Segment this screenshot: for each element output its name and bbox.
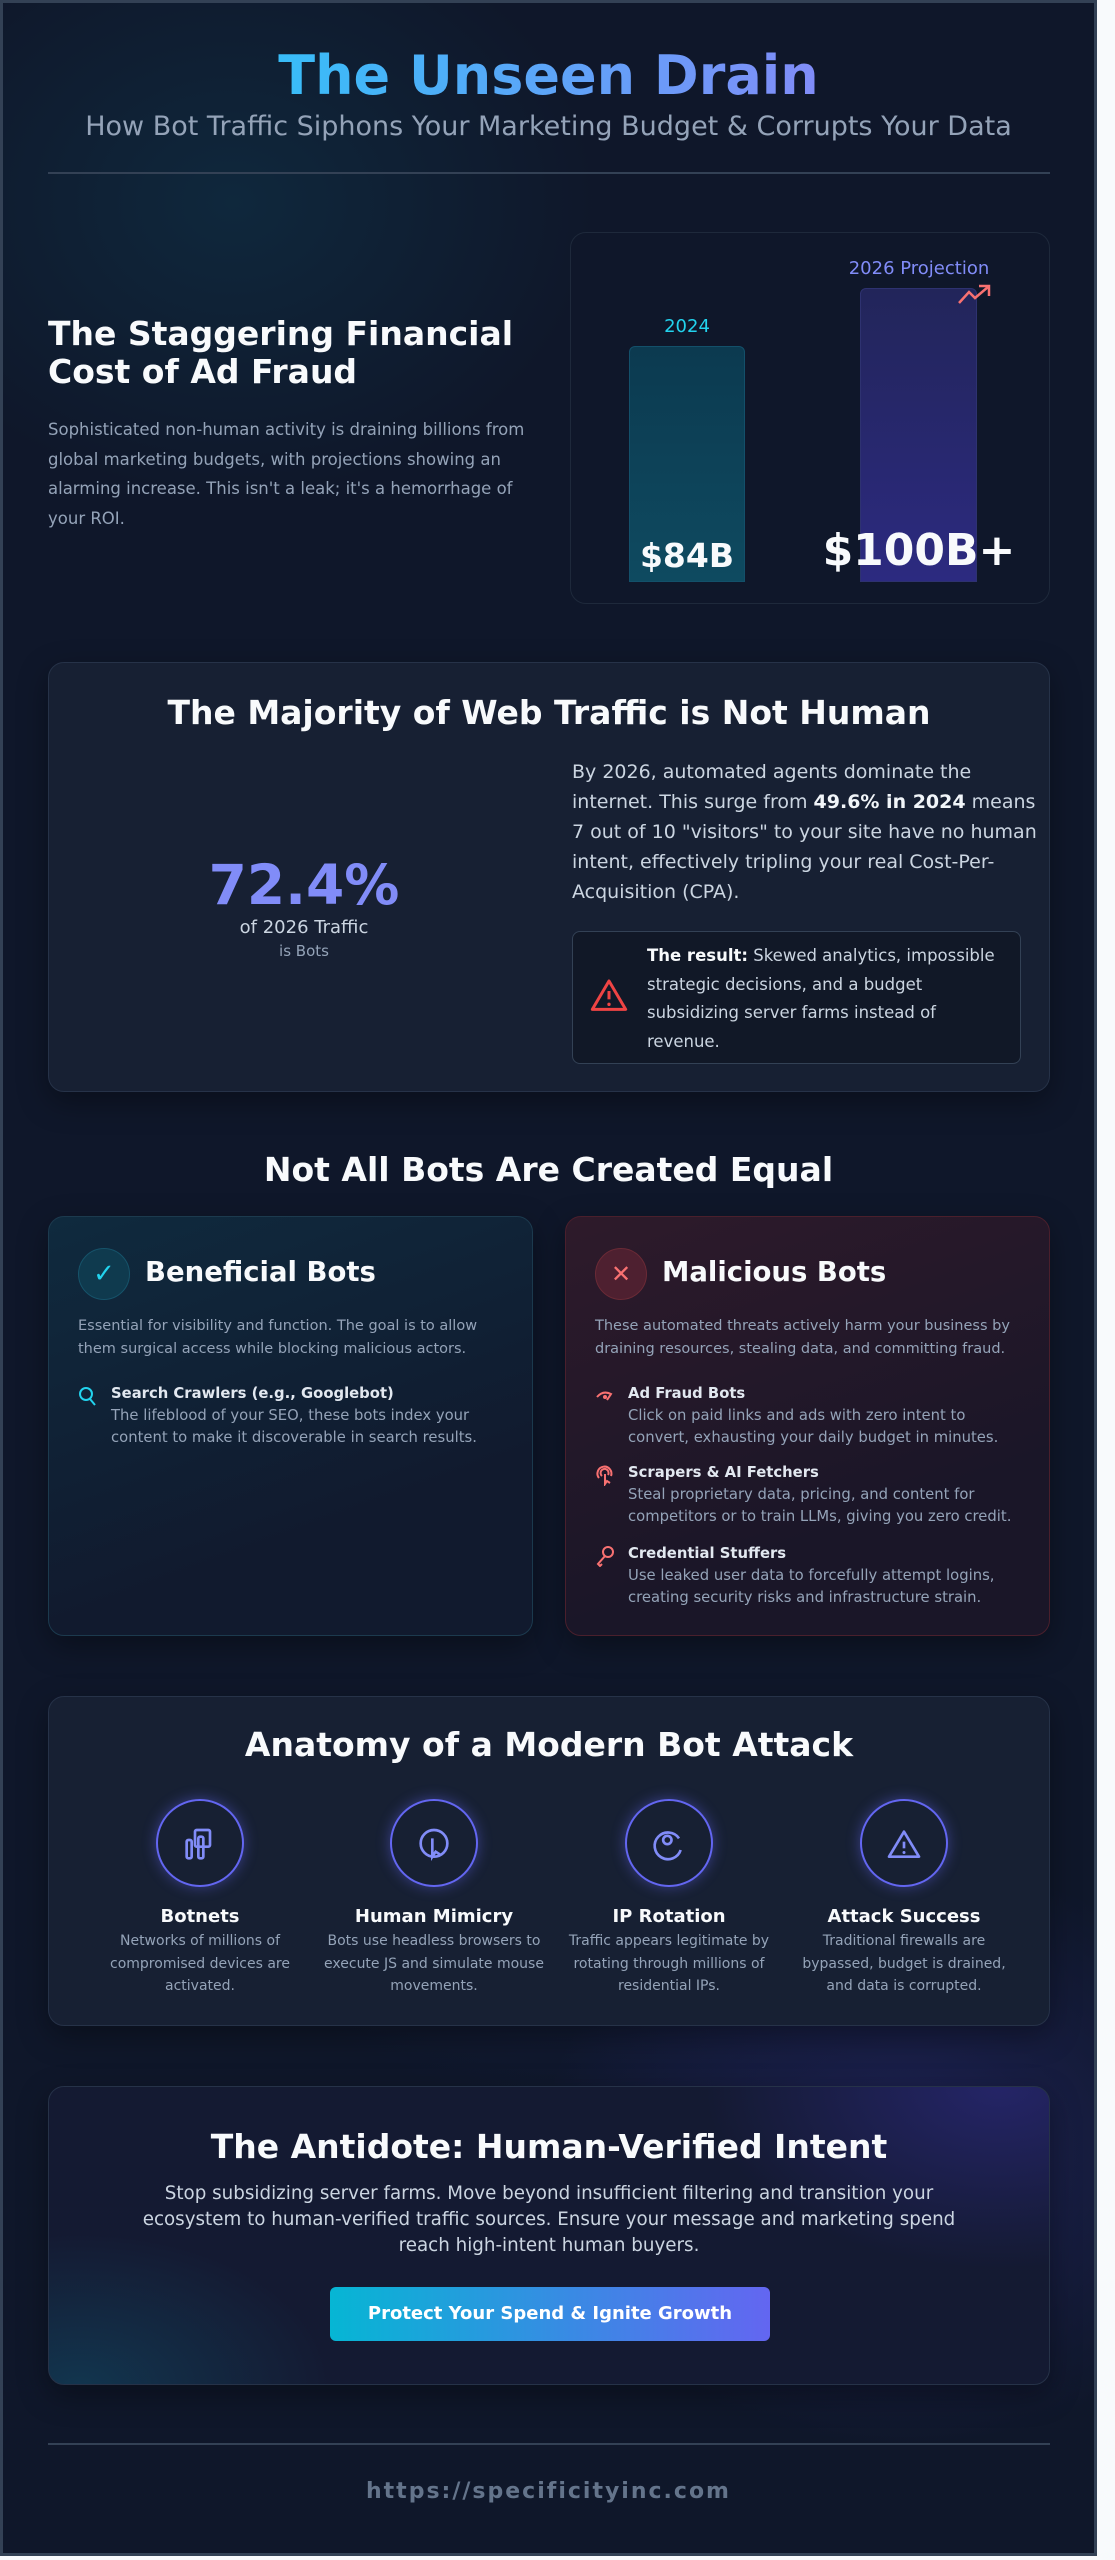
subtitle: How Bot Traffic Siphons Your Marketing Budget & Corrupts Your Data (85, 111, 1012, 142)
heading: The Antidote: Human-Verified Intent (211, 2127, 887, 2166)
icon: x: ✕ (611, 1260, 631, 1288)
heading: The Majority of Web Traffic is Not Human (167, 693, 931, 732)
item: credential stuffers: creating security risks and infrastructure strain. (628, 1589, 981, 1606)
step: ip rotation (568, 1791, 769, 1994)
bar 2024: $84B (640, 536, 734, 575)
paragraph: Stop subsidizing server farms. Move beyond insufficient filtering and transition your ecosystem to human-verified traffic sources. Ensure your message and marketing spend reach high-intent human buyers. (143, 2183, 955, 2256)
item: search crawlers (79, 1385, 477, 1446)
stat 72.4%: 72.4% (209, 853, 399, 917)
icon: x (595, 1248, 647, 1300)
bar 2024: 2024 (664, 316, 710, 337)
item: scrapers (596, 1464, 1011, 1525)
panel: beneficial bots: Beneficial Bots (145, 1256, 376, 1288)
heading: staggering cost (48, 314, 513, 391)
item: scrapers: competitors or to train LLMs, giving you zero credit. (628, 1508, 1011, 1525)
step: human mimicry: Human Mimicry (355, 1906, 513, 1927)
bar 2024 (629, 316, 745, 582)
item: ad fraud: Ad Fraud Bots (628, 1385, 745, 1402)
callout: result: The result: Skewed analytics, impossible strategic decisions, and a budget subsidizing server farms instead of revenue. (647, 946, 995, 1050)
section: financial cost text (48, 314, 524, 528)
stat 72.4%: of 2026 Traffic (240, 917, 368, 938)
callout: result (572, 931, 1021, 1064)
heading: staggering cost: The Staggering Financial (48, 314, 513, 353)
item: scrapers: Scrapers & AI Fetchers (628, 1464, 819, 1481)
icon: warning (590, 979, 628, 1011)
text block (572, 761, 1037, 903)
item: ad fraud: convert, exhausting your daily budget in minutes. (628, 1429, 998, 1446)
step: botnets: Botnets (160, 1906, 240, 1927)
panel: malicious bots (565, 1216, 1050, 1636)
panel: anatomy of bot attack (48, 1696, 1050, 2026)
panel: malicious bots: These automated threats actively harm your business by draining resources, stealing data, and committing fraud. (595, 1318, 1010, 1357)
item: search crawlers: content to make it discoverable in search results. (111, 1429, 477, 1446)
text block: By 2026, automated agents dominate the (572, 761, 971, 783)
panel: beneficial bots (48, 1216, 533, 1636)
bar 2026 projection: $100B+ (823, 525, 1015, 576)
item: search crawlers: Search Crawlers (e.g., Googlebot) (111, 1385, 394, 1402)
icon: check: ✓ (93, 1259, 115, 1289)
button (330, 2287, 770, 2341)
button: Protect Your Spend & Ignite Growth (368, 2303, 732, 2324)
item: scrapers: Steal proprietary data, pricing, and content for (628, 1486, 974, 1503)
title: The Unseen Drain (278, 44, 819, 107)
step: ip rotation: IP Rotation (612, 1906, 726, 1927)
text block: Acquisition (CPA). (572, 881, 739, 903)
text block: intent, effectively tripling your real Cost-Per- (572, 851, 994, 873)
stat 72.4%: is Bots (279, 942, 329, 960)
item: credential stuffers: Use leaked user data to forcefully attempt logins, (628, 1567, 995, 1584)
panel: majority not human (48, 662, 1050, 1092)
stat 72.4% (209, 853, 399, 960)
chart card (570, 232, 1050, 604)
icon: trend arrow (958, 284, 990, 304)
footer url: https://specificityinc.com (366, 2479, 731, 2504)
step: attack success (802, 1791, 1006, 1994)
text block: 7 out of 10 "visitors" to your site have no human (572, 821, 1037, 843)
paragraph: Sophisticated non-human activity is draining billions from global marketing budgets, with projections showing an alarming increase. This isn't a leak; it's a hemorrhage of your ROI. (48, 420, 524, 528)
icon: check (78, 1248, 130, 1300)
heading: not all bots: Not All Bots Are Created Equal (264, 1150, 833, 1189)
heading: Anatomy of a Modern Bot Attack (245, 1725, 853, 1764)
panel: antidote (48, 2086, 1050, 2385)
bar 2026 projection (823, 258, 1015, 582)
panel: malicious bots: Malicious Bots (662, 1256, 886, 1288)
step: botnets: Networks of millions of compromised devices are activated. (110, 1933, 290, 1994)
step: human mimicry: Bots use headless browsers to execute JS and simulate mouse movements. (324, 1933, 544, 1994)
text block: internet. This surge from 49.6% in 2024 means (572, 791, 1035, 813)
step: botnets (110, 1791, 290, 1994)
item: ad fraud (596, 1385, 998, 1446)
bar 2026 projection: 2026 Projection (849, 258, 989, 279)
step: human mimicry (324, 1791, 544, 1994)
step: attack success: Traditional firewalls are bypassed, budget is drained, and data is corrupted. (802, 1933, 1006, 1994)
item: credential stuffers: Credential Stuffers (628, 1545, 786, 1562)
item: search crawlers: The lifeblood of your SEO, these bots index your (111, 1407, 469, 1424)
item: credential stuffers (596, 1545, 995, 1606)
step: attack success: Attack Success (828, 1906, 980, 1927)
step: ip rotation: Traffic appears legitimate by rotating through millions of residential IPs. (569, 1933, 769, 1994)
panel: beneficial bots: Essential for visibility and function. The goal is to allow them surgical access while blocking malicious actors. (78, 1318, 477, 1357)
heading: staggering cost: Cost of Ad Fraud (48, 352, 357, 391)
item: ad fraud: Click on paid links and ads with zero intent to (628, 1407, 965, 1424)
